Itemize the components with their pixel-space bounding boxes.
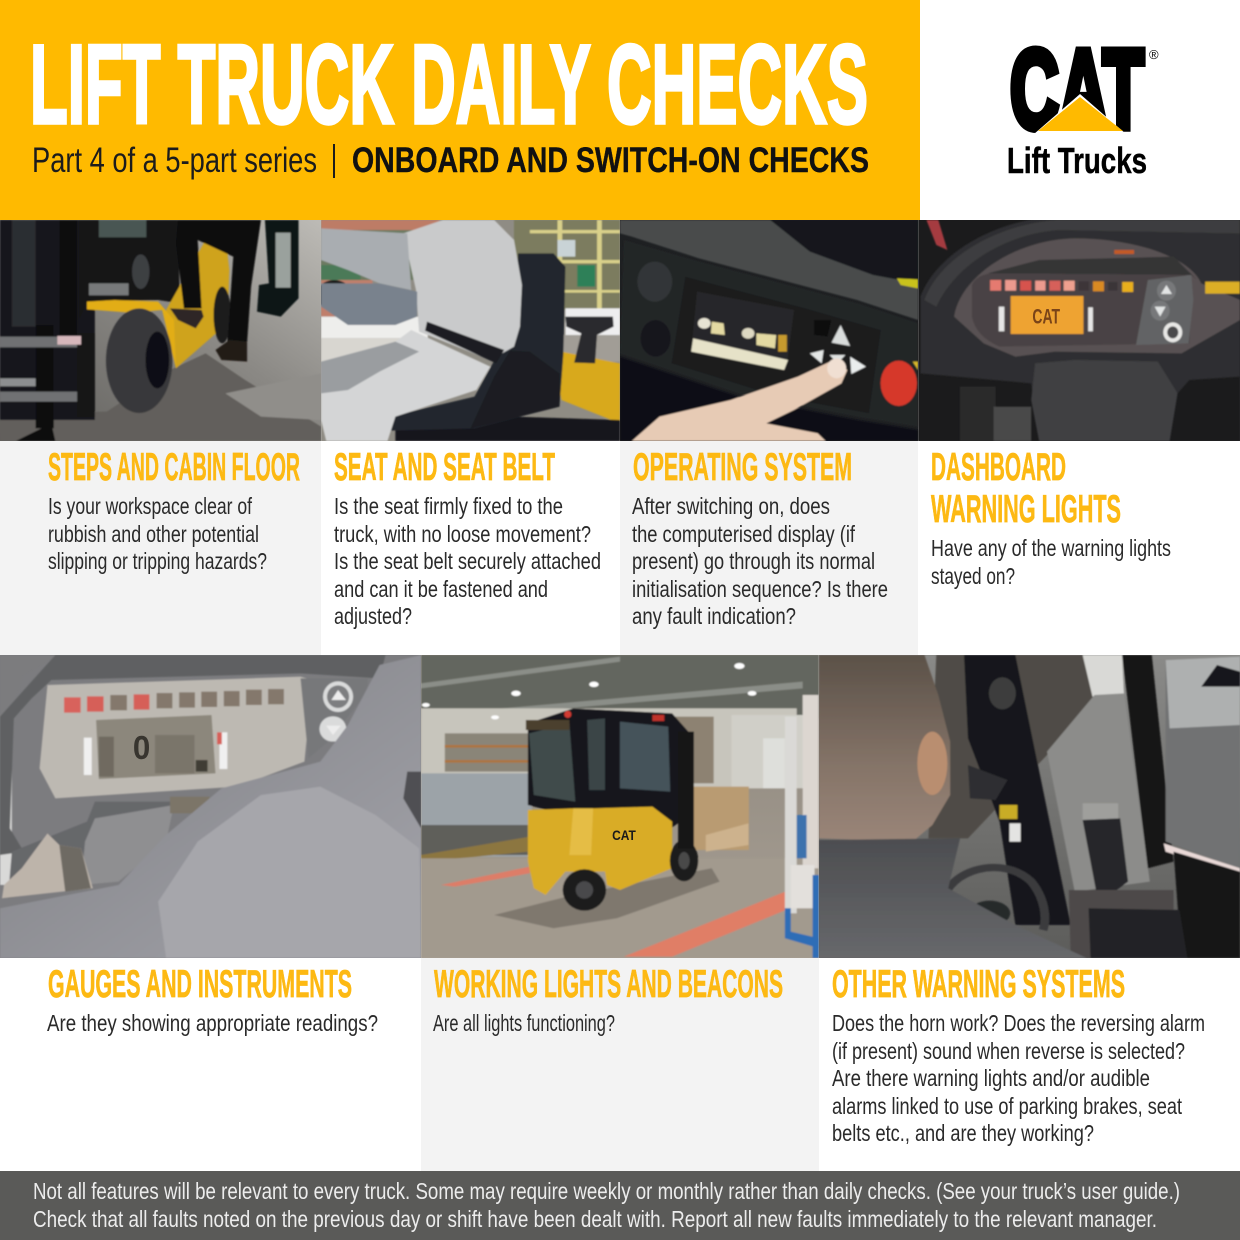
header banner <box>0 0 920 220</box>
text panel: seat and seat belt: and can it be fastened and <box>334 576 548 602</box>
text panel: operating system: OPERATING SYSTEM <box>633 446 852 489</box>
subtitle: divider and section name: ONBOARD AND SWITCH-ON CHECKS <box>352 141 869 180</box>
text panel: operating system: After switching on, does <box>632 493 830 519</box>
photo: operator checking warning systems <box>819 655 1240 958</box>
text panel: dashboard warning lights: DASHBOARD <box>931 446 1066 489</box>
text panel: dashboard warning lights <box>918 441 1240 655</box>
text panel: other warning systems <box>819 958 1240 1171</box>
text panel: seat and seat belt: adjusted? <box>334 603 412 629</box>
subtitle: series: Part 4 of a 5-part series <box>32 141 317 180</box>
text panel: gauges and instruments: GAUGES AND INSTRUMENTS <box>48 963 352 1006</box>
photo: seat and seat belt <box>319 220 620 441</box>
text panel: gauges and instruments: Are they showing appropriate readings? <box>47 1010 378 1036</box>
text panel: working lights and beacons: Are all lights functioning? <box>433 1010 615 1036</box>
text panel: steps and cabin floor: rubbish and other potential <box>48 521 259 547</box>
speed readout: 0 <box>133 729 150 766</box>
photo: gauges and instruments <box>0 655 421 958</box>
logo: Cat Lift Trucks: Lift Trucks <box>1007 140 1147 181</box>
text panel: steps and cabin floor <box>0 441 321 655</box>
text panel: steps and cabin floor: slipping or tripping hazards? <box>48 548 267 574</box>
photo: dashboard warning lights behind steering wheel <box>918 217 1240 441</box>
footer note <box>0 1171 1240 1240</box>
text panel: seat and seat belt: truck, with no loose movement? <box>334 521 591 547</box>
text panel: seat and seat belt: Is the seat belt securely attached <box>334 548 601 574</box>
text panel: steps and cabin floor: STEPS AND CABIN FLOOR <box>48 446 300 489</box>
text panel: operating system: initialisation sequence? Is there <box>632 576 888 602</box>
logo: Cat Lift Trucks <box>1007 27 1159 181</box>
text panel: steps and cabin floor: Is your workspace clear of <box>48 493 252 519</box>
text panel: working lights and beacons: WORKING LIGHTS AND BEACONS <box>434 963 783 1006</box>
text panel: seat and seat belt: SEAT AND SEAT BELT <box>334 446 555 489</box>
text panel: operating system <box>620 441 918 655</box>
text panel: operating system: the computerised display (if <box>632 521 855 547</box>
logo: Cat Lift Trucks: CAT <box>1010 27 1144 152</box>
text panel: other warning systems: Are there warning lights and/or audible <box>832 1065 1150 1091</box>
text panel: dashboard warning lights: Have any of the warning lights <box>931 535 1171 561</box>
truck badge: CAT <box>612 828 636 844</box>
text panel: operating system: any fault indication? <box>632 603 796 629</box>
photo: truck in warehouse with working lights <box>421 655 819 958</box>
logo: Cat Lift Trucks: ® <box>1149 47 1159 62</box>
text panel: other warning systems: belts etc., and are they working? <box>832 1120 1094 1146</box>
text panel: seat and seat belt <box>321 441 620 655</box>
text panel: dashboard warning lights: stayed on? <box>931 563 1015 589</box>
photo: operating system display <box>620 220 918 441</box>
text panel: seat and seat belt: Is the seat firmly fixed to the <box>334 493 563 519</box>
text panel: operating system: present) go through its normal <box>632 548 875 574</box>
text panel: gauges and instruments <box>0 958 421 1171</box>
text panel: working lights and beacons <box>421 958 819 1171</box>
photo: stepping onto truck <box>0 220 321 441</box>
display logo: CAT <box>1032 304 1060 329</box>
